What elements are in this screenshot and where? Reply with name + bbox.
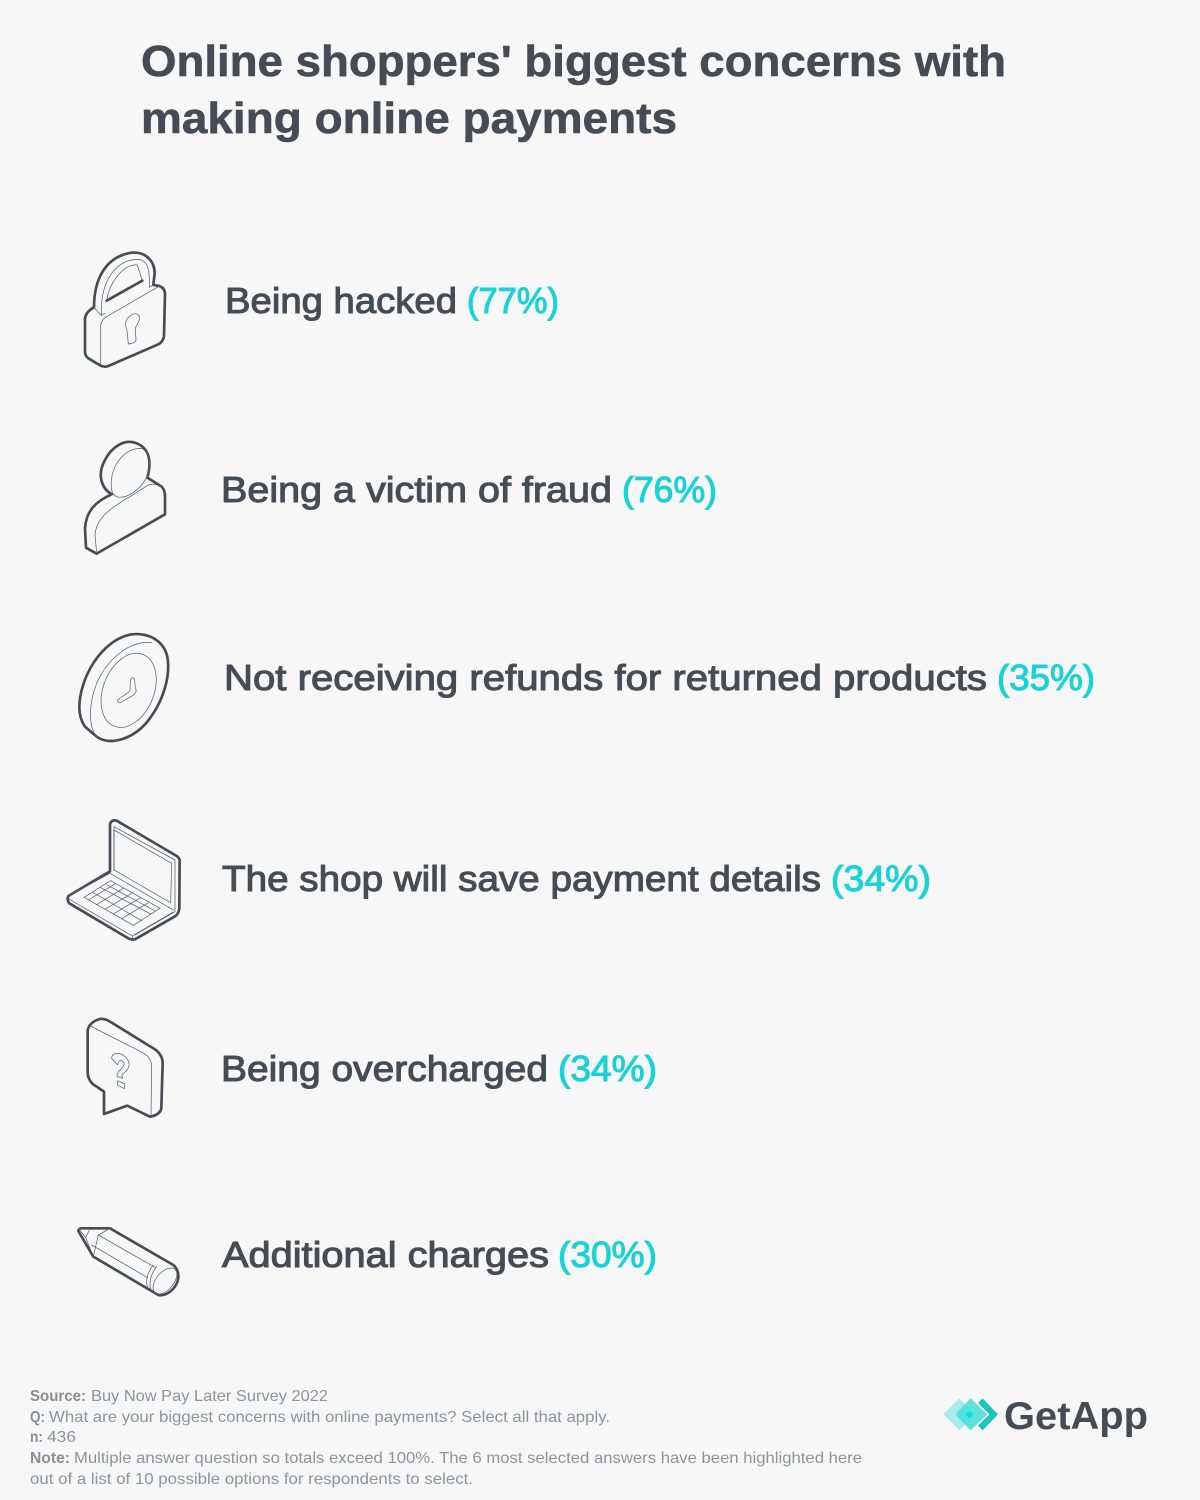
icon: padlock [85,253,165,367]
item: being hacked: (77%) [467,280,559,321]
item: the shop will save payment details: (34%) [831,858,931,899]
icon: pencil [78,1228,181,1298]
footer notes: Note: [30,1450,70,1467]
footer notes [30,1388,862,1488]
item: being overcharged: (34%) [558,1048,657,1089]
item: additional charges: (30%) [558,1234,657,1275]
item: being hacked: Being hacked [225,280,457,321]
logo: GetApp: GetApp [1004,1395,1148,1438]
footer notes: Multiple answer question so totals exceed 100%. The 6 most selected answers have been highlighted here [74,1450,862,1467]
title: Online shoppers' biggest concerns with [141,37,1006,86]
footer notes: Source: [30,1388,86,1405]
item: not receiving refunds: Not receiving refunds for returned products [224,657,987,698]
icon: laptop [68,820,180,940]
item: additional charges [222,1234,657,1275]
item: being overcharged [221,1048,657,1089]
title [141,37,1006,143]
item: being hacked [225,280,559,321]
logo: GetApp [943,1395,1148,1438]
item: additional charges: Additional charges [222,1234,549,1275]
item: the shop will save payment details: The shop will save payment details [222,858,821,899]
item: not receiving refunds: (35%) [997,657,1095,698]
icon: clock [79,634,168,741]
icon: speech bubble with question mark [88,1019,163,1117]
footer notes: What are your biggest concerns with online payments? Select all that apply. [49,1409,610,1426]
footer notes: out of a list of 10 possible options for respondents to select. [30,1471,473,1488]
item: being a victim of fraud: Being a victim of fraud [221,469,612,510]
item: being a victim of fraud: (76%) [622,469,717,510]
footer notes: Buy Now Pay Later Survey 2022 [91,1388,328,1405]
title: making online payments [141,94,677,143]
footer notes: n: [30,1429,43,1446]
footer notes: 436 [47,1429,76,1446]
icon: person [85,442,165,554]
item: being overcharged: Being overcharged [221,1048,548,1089]
footer notes: Q: [30,1409,45,1426]
